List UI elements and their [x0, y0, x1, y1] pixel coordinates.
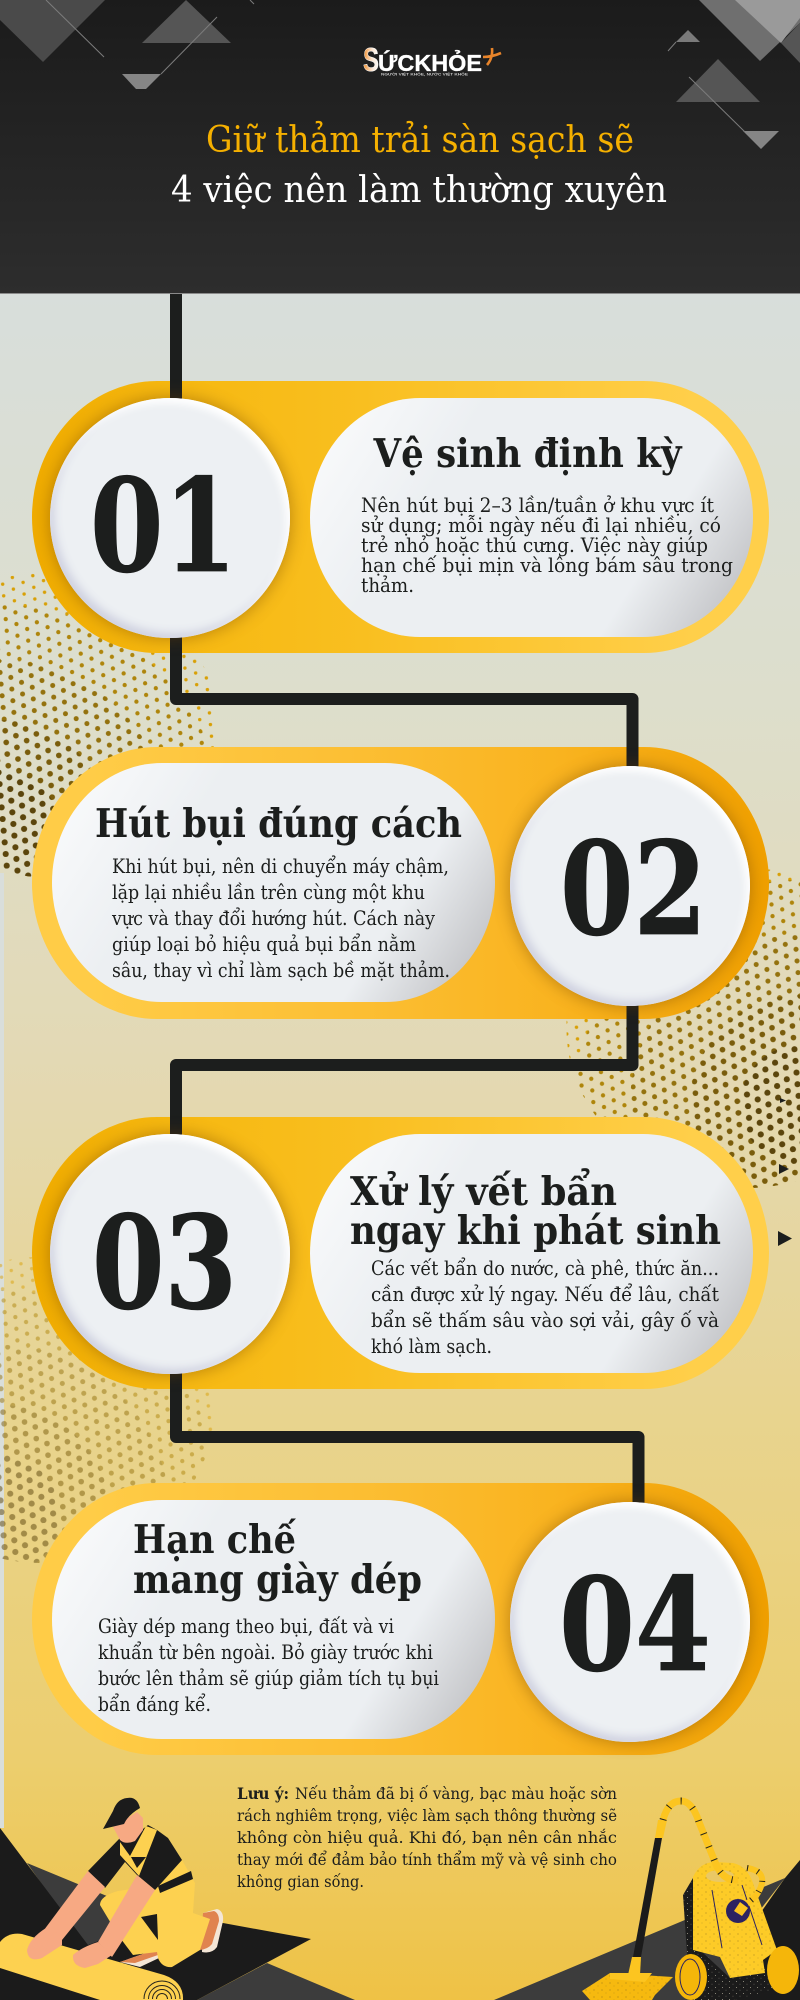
note text: thay mới để đảm bảo tính thẩm mỹ và vệ sinh cho [237, 1851, 617, 1869]
wheels [675, 1946, 799, 2000]
title [171, 120, 667, 211]
halftone dot decorations [0, 574, 800, 1563]
logo: NGƯỜI VIỆT KHỎE, NƯỚC VIỆT KHỎE [381, 72, 468, 76]
body 04: bước lên thảm sẽ giúp giảm tích tụ bụi [98, 1667, 439, 1690]
left edge strip [0, 873, 4, 1828]
body rear black [683, 1878, 780, 2000]
body 02: giúp loại bỏ hiệu quả bụi bẩn nằm [112, 932, 416, 956]
note text: rách nghiêm trọng, việc làm sạch thông thường sẽ [237, 1807, 617, 1825]
body 02 [111, 854, 450, 982]
logo [363, 41, 501, 78]
shirt [88, 1825, 182, 1890]
belt [158, 1871, 193, 1893]
body 04: khuẩn từ bên ngoài. Bỏ giày trước khi [98, 1640, 433, 1664]
halftone right [566, 870, 800, 1188]
logo: ỨCKHỎE [378, 48, 482, 76]
halftone upper left [0, 574, 214, 876]
hose socket [726, 1899, 750, 1923]
geometric triangles [0, 0, 800, 149]
number 01: 01 [90, 451, 237, 602]
title: 4 việc nên làm thường xuyên [171, 170, 667, 211]
note text: Lưu ý: [237, 1784, 289, 1803]
note text: không còn hiệu quả. Khi đó, bạn nên cân nhắc [237, 1829, 617, 1847]
heading 04: Hạn chế [133, 1517, 296, 1563]
body 02: vực và thay đổi hướng hút. Cách này [111, 906, 435, 930]
body yellow [693, 1862, 777, 1978]
note text: Nếu thảm đã bị ố vàng, bạc màu hoặc sờn [295, 1785, 617, 1803]
panel: step 02 [32, 747, 769, 1019]
hose [663, 1801, 762, 1909]
nozzle [582, 1973, 673, 2000]
body 03: Các vết bẩn do nước, cà phê, thức ăn... [371, 1256, 719, 1280]
body 04: Giày dép mang theo bụi, đất và vi [98, 1615, 394, 1638]
halftone lower left [0, 1257, 212, 1563]
heading 01: Vệ sinh định kỳ [373, 431, 683, 477]
arms [44, 1871, 105, 1940]
title: Giữ thảm trải sàn sạch sẽ [206, 120, 634, 161]
body 01 [361, 494, 733, 597]
body 01: trẻ nhỏ hoặc thú cưng. Việc này giúp [361, 534, 708, 557]
body 01: hạn chế bụi mịn và lông bám sâu trong [361, 554, 733, 577]
illustration: worker rolling carpet [0, 1798, 223, 2000]
illustration: vacuum cleaner [582, 1801, 799, 2000]
heading 04 [133, 1517, 422, 1603]
number 02: 02 [560, 814, 707, 965]
body 03: cần được xử lý ngay. Nếu để lâu, chất [371, 1282, 719, 1306]
heading 02: Hút bụi đúng cách [95, 801, 462, 847]
body 02: sâu, thay vì chỉ làm sạch bề mặt thảm. [112, 959, 450, 982]
panel: step 04 [32, 1483, 769, 1755]
number 03: 03 [92, 1188, 237, 1339]
body 02: lặp lại nhiều lần trên cùng một khu [112, 881, 425, 904]
heading 04: mang giày dép [133, 1557, 422, 1603]
wand [628, 1820, 667, 1975]
body 03: khó làm sạch. [371, 1335, 492, 1358]
heading 03: Xử lý vết bẩn [350, 1168, 617, 1215]
trousers [100, 1860, 210, 1967]
logo: S [363, 41, 379, 78]
cap [103, 1798, 140, 1829]
header decoration and title [0, 0, 800, 211]
body 04 [98, 1615, 439, 1716]
number 04: 04 [559, 1550, 711, 1701]
head [113, 1812, 143, 1843]
hands [27, 1928, 62, 1959]
carpet roll [0, 1934, 183, 2000]
body 01: Nên hút bụi 2–3 lần/tuần ở khu vực ít [361, 494, 714, 517]
panel: step 01 [32, 381, 769, 653]
heading 03: ngay khi phát sinh [350, 1208, 721, 1254]
panel: step 03 [32, 1117, 769, 1389]
connector 02 to 03 [176, 990, 632, 1150]
body 03: bẩn sẽ thấm sâu vào sợi vải, gây ố và [371, 1308, 719, 1332]
heading 03 [350, 1168, 721, 1254]
header band [0, 0, 800, 294]
connector 03 to 04 [176, 1360, 638, 1520]
body 01: thảm. [361, 574, 414, 597]
body 01: sử dụng; mỗi ngày nếu đi lại nhiều, có [361, 513, 721, 537]
body 04: bẩn đáng kể. [98, 1692, 211, 1716]
small arrow markers on right [778, 1098, 792, 1246]
body 03 [371, 1256, 719, 1358]
note text: không gian sống. [237, 1873, 364, 1891]
connector 01 to 02 [176, 294, 632, 790]
shoes [120, 1909, 223, 1967]
bib straps [120, 1826, 157, 1876]
floor shapes [0, 1828, 800, 2000]
body 02: Khi hút bụi, nên di chuyển máy chậm, [112, 854, 449, 878]
